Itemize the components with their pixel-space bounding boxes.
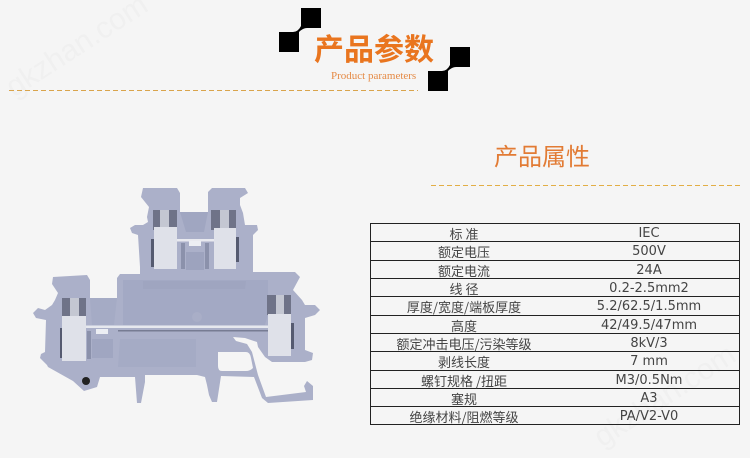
row: insulation: PA/V2-V0 <box>620 409 678 424</box>
lower right terminal <box>267 295 294 356</box>
mid cavity shade <box>123 280 268 325</box>
divider: attributes <box>431 185 740 186</box>
row: standard <box>371 224 739 242</box>
upper right terminal <box>211 210 239 269</box>
body silhouette <box>33 188 320 403</box>
divider: header <box>9 90 418 91</box>
upper bridge <box>177 239 214 270</box>
row: rated voltage: 额定电压 <box>438 242 490 261</box>
watermark: bottom right: gkzhan.com <box>588 338 742 454</box>
lower left terminal <box>60 298 86 361</box>
row: height: 42/49.5/47mm <box>601 318 697 333</box>
row: gauge: A3 <box>640 391 658 406</box>
illustration: terminal block <box>33 188 320 403</box>
row: impulse voltage: 8kV/3 <box>630 336 668 351</box>
upper left terminal <box>151 210 177 269</box>
row: rated current: 24A <box>636 263 662 278</box>
row: wire diameter: 线 径 <box>450 279 478 298</box>
conducting bar <box>86 312 268 332</box>
row: rated current <box>371 261 739 279</box>
row: insulation: 绝缘材料/阻燃等级 <box>409 407 519 426</box>
heading: product attributes: 产品属性 <box>494 137 590 172</box>
lower left chamber <box>87 329 113 359</box>
subtitle: Product parameters <box>331 70 416 82</box>
row: screw <box>371 371 739 389</box>
row: height: 高度 <box>451 316 477 335</box>
row: height <box>371 316 739 334</box>
row: rated current: 额定电流 <box>438 261 490 280</box>
row: impulse voltage <box>371 334 739 352</box>
row: insulation <box>409 407 678 426</box>
table: specifications <box>370 223 740 425</box>
row: standard: IEC <box>638 226 660 241</box>
row: rated voltage <box>371 242 739 261</box>
icon: bottom-right black squares <box>428 47 470 91</box>
row: impulse voltage: 额定冲击电压/污染等级 <box>396 334 532 353</box>
foot hole <box>82 377 90 385</box>
row: rated voltage: 500V <box>632 244 666 259</box>
row: strip length: 剥线长度 <box>438 352 490 371</box>
lower cavity shade <box>118 339 196 367</box>
row: strip length: 7 mm <box>630 354 668 369</box>
row: gauge: 塞规 <box>451 389 477 408</box>
left cavity shade <box>90 298 117 325</box>
row: thickness <box>371 297 739 316</box>
row: strip length <box>371 352 739 371</box>
row: wire diameter: 0.2-2.5mm2 <box>609 281 689 296</box>
row: thickness: 5.2/62.5/1.5mm <box>597 299 701 314</box>
row: standard: 标 准 <box>450 224 478 243</box>
row: wire diameter <box>371 279 739 297</box>
row: screw: 螺钉规格 /扭距 <box>421 371 507 390</box>
row: screw: M3/0.5Nm <box>616 373 682 388</box>
row: thickness: 厚度/宽度/端板厚度 <box>407 297 521 316</box>
title: 产品参数 <box>314 25 434 69</box>
upper cavity shade <box>180 212 208 232</box>
icon: top-left black squares <box>279 8 321 52</box>
row: gauge <box>371 389 739 407</box>
